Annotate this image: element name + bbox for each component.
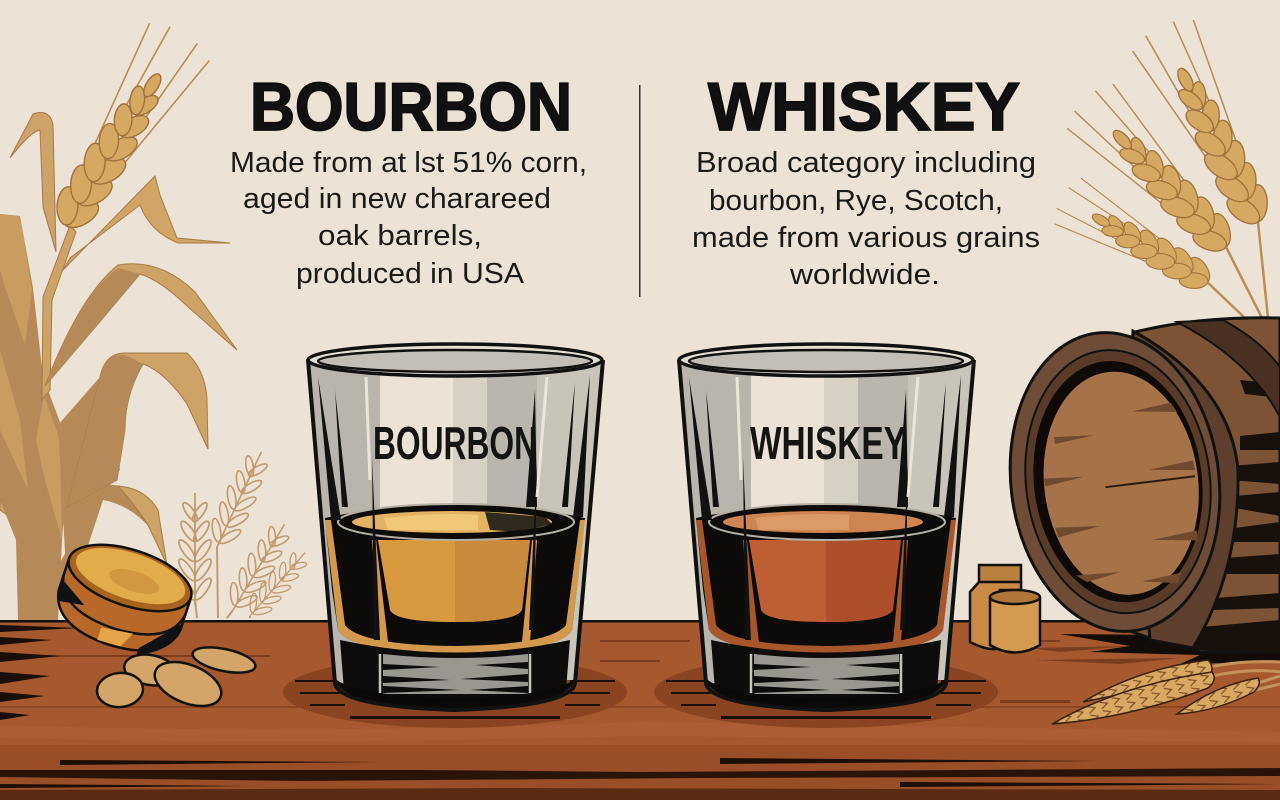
glass: bourbon <box>308 344 603 712</box>
leaf hook <box>10 112 56 252</box>
glass frame <box>679 360 974 710</box>
shadow: bourbon glass <box>283 656 627 728</box>
glass label: BOURBON <box>373 417 537 469</box>
bottom leaf <box>55 484 167 600</box>
rim <box>308 344 602 376</box>
far hoop <box>1177 320 1280 417</box>
leaf long <box>45 264 237 386</box>
near hoop <box>1130 331 1238 648</box>
text block: whiskey description: Broad category including <box>696 147 1036 179</box>
wheat on table <box>1052 660 1280 724</box>
liquid <box>325 504 585 654</box>
base <box>706 640 946 712</box>
nuts <box>96 643 258 715</box>
glass tint <box>308 360 603 683</box>
glass: whiskey <box>679 344 974 712</box>
tin <box>48 532 200 664</box>
shadow of barrel <box>1060 634 1280 664</box>
leaf fold <box>63 176 230 270</box>
text block: bourbon description: aged in new charareed <box>243 183 551 215</box>
base <box>335 640 575 712</box>
corn plant <box>0 16 237 620</box>
text block: whiskey description: bourbon, Rye, Scotch, <box>709 185 1003 217</box>
glass frame <box>308 360 603 710</box>
divider <box>639 85 640 297</box>
text block: bourbon description: produced in USA <box>296 258 525 290</box>
wheat ear <box>33 16 214 247</box>
barrel head <box>993 320 1237 644</box>
text block: whiskey description: made from various grains <box>692 222 1040 254</box>
corks <box>970 565 1040 652</box>
leaf base fill <box>58 377 120 570</box>
pale wheat sprigs <box>176 444 316 625</box>
glass tint <box>679 360 974 683</box>
text block: whiskey description <box>692 147 1040 291</box>
stem <box>42 225 76 400</box>
title: whiskey: WHISKEY <box>708 69 1020 145</box>
text block: bourbon description: Made from at lst 51% corn, <box>230 147 587 179</box>
leaf lower <box>67 353 208 507</box>
text block: bourbon description <box>230 147 587 290</box>
liquid <box>696 504 956 654</box>
title: bourbon: BOURBON <box>250 69 572 145</box>
barrel <box>993 318 1280 652</box>
text block: bourbon description: oak barrels, <box>318 220 482 252</box>
left leaf low <box>0 498 45 560</box>
staves streaks <box>1190 380 1280 652</box>
wheat stalks top right <box>1049 13 1280 318</box>
stalk silhouette <box>0 214 68 620</box>
barrel body <box>1115 318 1280 652</box>
text block: whiskey description: worldwide. <box>789 259 940 291</box>
rim <box>679 344 973 376</box>
glass label: WHISKEY <box>750 417 906 469</box>
shadow: whiskey glass <box>654 656 998 728</box>
table <box>0 620 1280 800</box>
